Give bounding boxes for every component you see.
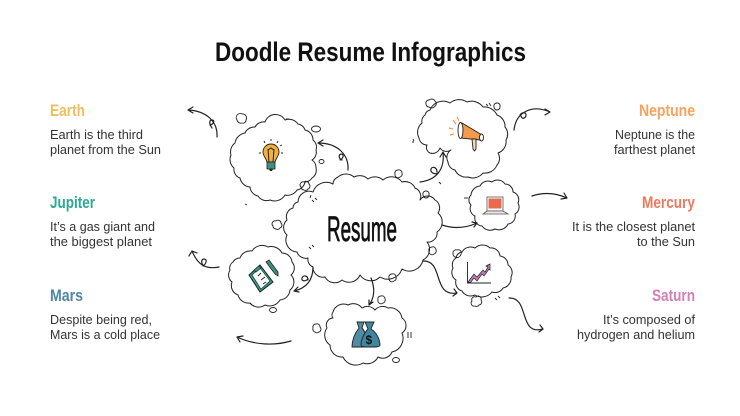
- cloud: clipboard thought bubble: [229, 245, 294, 307]
- text block: Mercury: [572, 193, 696, 249]
- cloud: growth chart thought bubble: [452, 245, 512, 297]
- cloud: money bags thought bubble: [325, 304, 406, 365]
- text block: Earth: planet from the Sun: [50, 143, 161, 157]
- icon: lightbulb: [259, 139, 283, 171]
- cloud: laptop thought bubble: [469, 180, 519, 230]
- small doodle puffs: [236, 99, 500, 362]
- text block: Earth: Earth is the third: [50, 128, 143, 142]
- cloud label: Resume: Resume: [327, 210, 397, 249]
- central cloud: Resume: [284, 174, 442, 283]
- icon: line chart: [468, 262, 491, 283]
- icon: money bags: $: [366, 333, 372, 347]
- title: Doodle Resume Infographics: [215, 37, 526, 67]
- text block: Saturn: Saturn: [652, 286, 695, 305]
- text block: Jupiter: Jupiter: [50, 193, 95, 212]
- text block: Jupiter: [50, 193, 155, 249]
- cloud: lightbulb thought bubble: [230, 114, 316, 201]
- text block: Mercury: to the Sun: [637, 235, 695, 249]
- text block: Neptune: Neptune is the: [615, 128, 695, 142]
- icon: megaphone: [449, 117, 484, 151]
- text block: Jupiter: the biggest planet: [50, 235, 153, 249]
- text block: Mercury: It is the closest planet: [572, 220, 696, 234]
- text block: Saturn: hydrogen and helium: [577, 328, 695, 342]
- icon: clipboard and pencil: [249, 260, 278, 292]
- text block: Mars: Despite being red,: [50, 313, 152, 327]
- text block: Saturn: [577, 286, 696, 342]
- arrows: [188, 107, 567, 344]
- text block: Earth: [50, 101, 161, 157]
- cloud: megaphone thought bubble: [418, 100, 508, 178]
- text block: Saturn: It’s composed of: [603, 313, 696, 327]
- text block: Jupiter: It’s a gas giant and: [50, 220, 155, 234]
- text block: Mars: Mars: [50, 286, 83, 305]
- icon: laptop: [483, 197, 508, 214]
- text block: Mercury: Mercury: [642, 193, 695, 212]
- text block: Mars: [50, 286, 160, 342]
- text block: Earth: Earth: [50, 101, 85, 120]
- text block: Neptune: farthest planet: [614, 143, 696, 157]
- text block: Neptune: [614, 101, 696, 157]
- text block: Mars: Mars is a cold place: [50, 328, 160, 342]
- text block: Neptune: Neptune: [639, 101, 695, 120]
